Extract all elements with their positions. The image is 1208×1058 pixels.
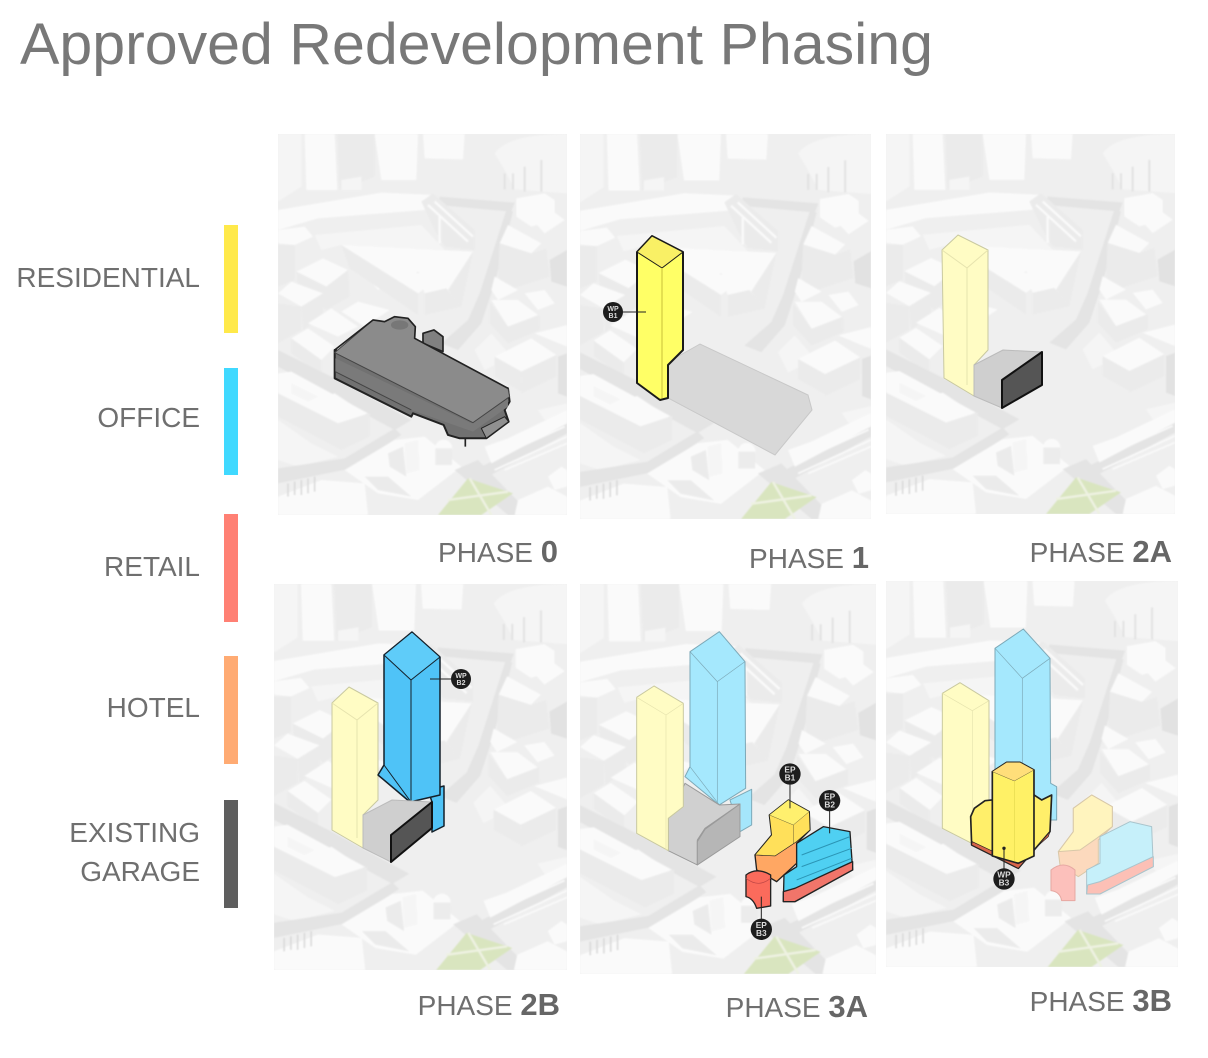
tower: residential, faded bbox=[942, 683, 989, 843]
tower: residential, faded bbox=[942, 235, 988, 396]
label: phase 2A: PHASE 2A bbox=[1030, 534, 1172, 569]
legend: retail bbox=[104, 514, 238, 622]
label: phase 1: PHASE 1 bbox=[749, 540, 869, 575]
badge: EP B2: B2 bbox=[824, 799, 835, 809]
legend: hotel: HOTEL bbox=[107, 692, 200, 723]
legend: hotel bbox=[107, 656, 238, 764]
faded block: EP B3 bbox=[1051, 865, 1075, 901]
garage bbox=[363, 800, 432, 862]
tower: office WP B2 bbox=[378, 632, 444, 832]
faded block: EP B2 bbox=[1087, 822, 1153, 894]
badge: WP B2: WP bbox=[455, 673, 467, 680]
badge: EP B3: B3 bbox=[756, 928, 767, 938]
badge: WP B1: B1 bbox=[609, 313, 618, 320]
badge: WP B2 bbox=[430, 669, 471, 689]
label: phase 3A: PHASE 3A bbox=[726, 989, 868, 1024]
tower: office, faded bbox=[995, 629, 1057, 820]
panel: phase 2A bbox=[886, 134, 1175, 514]
badge: EP B1: B1 bbox=[785, 773, 796, 783]
panel: phase 2B bbox=[274, 584, 567, 970]
panel: phase 1 bbox=[580, 134, 871, 519]
panel: phase 3A bbox=[580, 584, 876, 974]
block: EP B3 retail bbox=[746, 871, 771, 908]
badge: EP B1: EP bbox=[784, 765, 796, 775]
panel: phase 0 bbox=[278, 134, 567, 515]
legend: office bbox=[97, 368, 238, 475]
legend: existing garage: GARAGE bbox=[80, 856, 200, 887]
legend: existing garage bbox=[69, 800, 238, 908]
legend: residential bbox=[16, 225, 238, 333]
tower: residential, faded bbox=[637, 686, 683, 851]
label: phase 0: PHASE 0 bbox=[438, 534, 558, 569]
legend: office: OFFICE bbox=[97, 402, 200, 433]
badge: WP B3 bbox=[993, 847, 1015, 890]
panel: phase 3B bbox=[886, 581, 1178, 967]
garage with demolished section bbox=[974, 350, 1042, 408]
badge: EP B1 bbox=[779, 763, 801, 808]
tower: residential, faded bbox=[332, 687, 378, 848]
badge: EP B2: EP bbox=[824, 791, 836, 801]
title: Approved Redevelopment Phasing bbox=[20, 12, 933, 77]
legend bbox=[16, 225, 238, 908]
tower: residential WP B1 bbox=[637, 236, 683, 400]
block: EP B2 office on retail bbox=[783, 827, 853, 902]
block: EP B1 residential and hotel bbox=[755, 800, 810, 882]
badge: EP B3 bbox=[751, 897, 772, 940]
legend: existing garage: EXISTING bbox=[69, 817, 200, 848]
badge: WP B3: B3 bbox=[999, 878, 1010, 888]
badge: WP B2: B2 bbox=[457, 680, 466, 687]
badge: EP B2 bbox=[819, 790, 840, 833]
badge: WP B1 bbox=[603, 302, 646, 322]
label: phase 3B: PHASE 3B bbox=[1030, 983, 1172, 1018]
garage, faded bbox=[668, 344, 812, 455]
tower: office, faded bbox=[685, 632, 752, 832]
badge: EP B3: EP bbox=[756, 920, 767, 930]
block: WP B3 residential on retail bbox=[971, 762, 1052, 868]
label: phase 2B: PHASE 2B bbox=[418, 987, 560, 1022]
building: existing garage bbox=[335, 317, 510, 447]
badge: WP B1: WP bbox=[607, 306, 619, 313]
legend: residential: RESIDENTIAL bbox=[16, 262, 200, 293]
badge: WP B3: WP bbox=[997, 870, 1011, 880]
legend: retail: RETAIL bbox=[104, 551, 200, 582]
garage bbox=[668, 783, 740, 865]
faded block: EP B1 bbox=[1058, 795, 1112, 877]
